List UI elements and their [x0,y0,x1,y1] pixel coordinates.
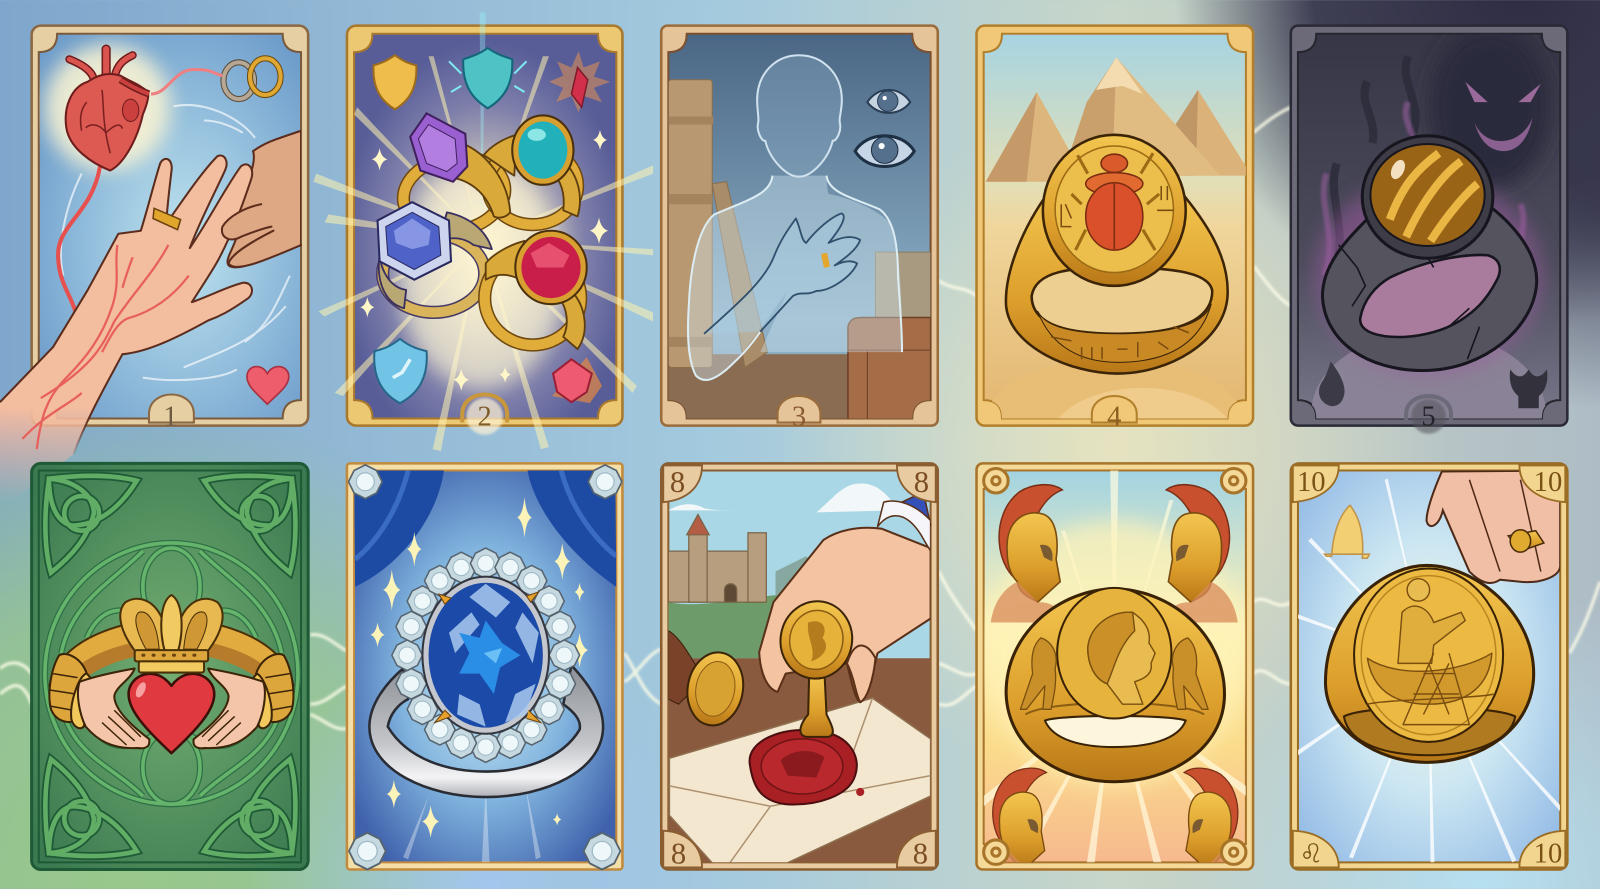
card 10 corner numbers: 10 [1534,838,1562,869]
number tab 1: 1 [163,402,178,433]
card 8 panel [668,471,931,862]
number tab 5 [1406,396,1451,434]
icon: large eye [855,136,914,166]
card 4 panel [984,34,1246,418]
number tab 1 [149,394,194,433]
card 8 frame [661,463,938,870]
ruby gem [515,231,587,304]
card 3: ghost figure [661,26,938,433]
blue hexagonal gem [378,202,451,280]
card 8 scene [668,483,931,870]
claddagh ring [49,595,294,753]
icon: linked rings [223,58,281,99]
card 10 panel [1298,471,1560,862]
card 6: claddagh ring [32,463,308,870]
card 8 corner numbers: 8 [913,836,928,870]
icon: teal shield [449,48,527,108]
icon: small heart [247,367,289,404]
number tab 5: 5 [1421,402,1436,433]
icon: blue shield [374,339,427,403]
number tab 2: 2 [478,402,492,433]
purple gem [410,113,467,182]
horse reliefs [1020,638,1208,709]
icon: burst gem [549,51,610,112]
celtic roundel [45,543,298,804]
card 10 corner numbers: ♌ [1299,838,1323,869]
table [668,658,931,870]
rays and helmets [982,471,1247,885]
scroll corners [984,468,1246,864]
artery ribbon [31,70,222,408]
card 8 corner numbers: 8 [914,465,929,499]
card 1: heart and ring finger [0,26,308,510]
card 9 panel [984,471,1246,862]
right cuff and hand [193,654,294,748]
card 6 panel [32,463,308,870]
filigree ring shoulders [379,135,585,349]
shadow demon and smoke [1311,26,1551,495]
card 10: fisherman ring [1291,463,1567,870]
silver band [369,665,603,797]
clouds [668,483,898,512]
ring bands [383,147,581,345]
envelope [669,698,931,867]
card 2: gemstone rings [313,12,653,451]
card 8 corner numbers: 8 [671,836,686,870]
card 3 frame [661,26,938,426]
card 8 corner medallions [663,465,936,867]
hieroglyphs [1051,186,1189,359]
card 1 panel [39,34,301,418]
scarab [1071,153,1159,250]
wax seal [750,730,864,804]
crown [120,595,223,673]
fingers over stamp [847,646,876,702]
icon: small eye [867,90,910,113]
diamond corners [348,465,622,870]
card 4 frame [977,26,1253,426]
card 9 frame [977,463,1253,870]
card 9: roman ring [977,463,1253,885]
diamond halo [392,548,580,762]
castle [668,514,766,602]
curtains and sparkles [354,471,616,867]
pyramids and dunes [986,57,1246,418]
heart [129,674,214,753]
number tab 4: 4 [1107,402,1121,433]
card 8 corner numbers [670,465,929,870]
hand holding stamp [759,492,931,702]
dark ring [1314,136,1543,374]
ghost hand with ring [704,213,860,334]
hand with ring [0,156,252,510]
icon: flame [1319,361,1345,406]
card 5 frame [1291,26,1567,426]
card 1 frame [32,26,308,426]
icon: pink gem [552,357,602,403]
spare stamp [668,630,696,705]
rays, hand and mitre [1298,471,1560,870]
ghost silhouette [688,55,902,380]
celtic corner knots [45,476,295,856]
roman ring [1006,588,1224,782]
icon: anatomical heart [66,49,149,171]
card 10 corner medallions [1293,465,1565,867]
card 1 contents [44,44,301,380]
scarab signet ring [1006,135,1228,374]
number tab 3 [778,396,820,433]
card 10 corner numbers: 10 [1534,467,1562,498]
card 2 frame [347,26,622,426]
icon: gold shield [373,55,416,109]
energy wisps between cards [0,107,1600,729]
seal stamp [774,596,858,737]
number tab 2 [462,394,507,435]
second hand fingertips [222,204,301,267]
portrait relief [1088,612,1155,704]
light rays [313,12,653,451]
card 4: scarab ring [975,24,1254,427]
card 7 panel [354,471,616,862]
left cuff and hand [49,654,149,748]
card 5: tiger eye cursed ring [1290,24,1569,435]
card 3 scene [668,80,931,426]
card 8: wax seal [661,463,938,870]
icon: demon mask [1510,370,1547,408]
oval sapphire [422,577,549,734]
card 3 panel [668,34,931,418]
card 5 panel [1298,34,1560,418]
card 8 corner numbers: 8 [670,465,685,499]
card 7 frame [347,463,622,870]
number tab 3: 3 [792,402,806,433]
ring on finger [153,208,181,230]
card 7: sapphire ring [347,463,622,870]
sparkles [360,130,608,391]
fisherman relief [1367,579,1495,725]
card 10 frame [1291,463,1567,870]
card 2 panel [354,34,616,418]
number tab 4 [1092,396,1137,433]
card 10 corner numbers [1297,467,1562,869]
teal gem [512,115,573,185]
fisherman signet ring [1325,565,1534,762]
card 10 corner numbers: 10 [1297,467,1326,498]
